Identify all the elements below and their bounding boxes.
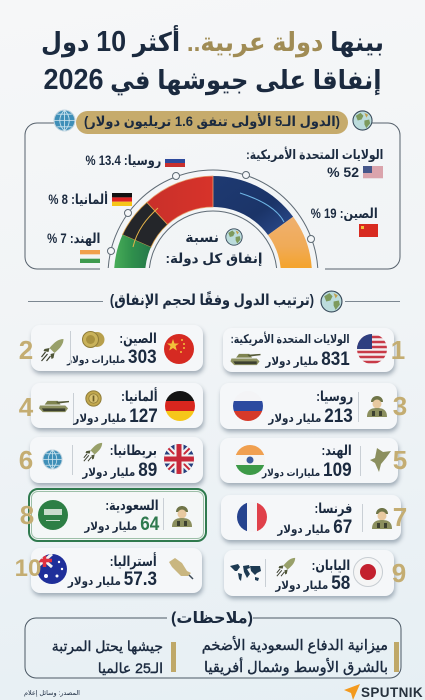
label: USA share: الولايات المتحدة الأمريكية: — [246, 147, 383, 162]
notes heading: (ملاحظات) — [171, 610, 253, 627]
card: Australia rank 10: 10 — [15, 555, 41, 582]
card: Germany rank 4 — [19, 384, 206, 434]
source: المصدر: وسائل إعلام — [24, 690, 80, 697]
label: USA share: 52 % — [327, 164, 359, 180]
card: USA rank 1: 831 مليار دولار — [266, 349, 350, 370]
card: Japan rank 9: 9 — [392, 558, 406, 588]
card: France rank 7: فرنسا: — [314, 500, 352, 516]
card: Australia rank 10 — [15, 548, 206, 598]
card: China rank 2: 2 — [19, 335, 33, 365]
card: India rank 5: 5 — [393, 445, 407, 475]
card: India rank 5: 109 مليارات دولار — [262, 460, 352, 481]
note: army rank — [52, 638, 176, 676]
icon: earth in gauge — [225, 228, 243, 246]
label: China share: الصين: 19 % — [311, 206, 378, 221]
card: Britain rank 6: 6 — [19, 445, 33, 475]
card: Britain rank 6: 89 مليار دولار — [82, 460, 157, 481]
note: army rank: جيشها يحتل المرتبة — [52, 638, 163, 654]
card: USA rank 1: 1 — [391, 335, 405, 365]
card: Saudi Arabia rank 8 highlighted — [20, 488, 207, 542]
label: India share: الهند: 7 % — [47, 231, 100, 246]
title — [41, 25, 384, 96]
card: Germany rank 4: 127 مليار دولار — [74, 406, 158, 427]
card: USA rank 1 — [222, 330, 405, 378]
card: Japan rank 9: اليابان: — [311, 557, 350, 573]
card: Japan rank 9: 58 مليار دولار — [275, 573, 350, 594]
note: army rank: الـ25 عالميا — [98, 660, 163, 676]
section heading: ranking — [28, 290, 400, 312]
note: Saudi budget: ميزانية الدفاع السعودية الأضخم — [202, 638, 388, 654]
card: China rank 2: الصين: — [120, 330, 157, 346]
label: USA share — [246, 146, 383, 180]
label: Russia share: روسيا: 13.4 % — [85, 153, 161, 168]
card: India rank 5 — [218, 439, 407, 488]
notes panel — [24, 610, 402, 678]
section heading: ranking: (ترتيب الدول وفقًا لحجم الإنفاق) — [110, 292, 314, 309]
card: USA rank 1: الولايات المتحدة الأمريكية: — [231, 332, 350, 346]
card: Russia rank 3 — [218, 384, 407, 434]
icon: earth — [352, 110, 373, 131]
card: Australia rank 10: أستراليا: — [110, 553, 157, 569]
title: إنفاقا على جيوشها في 2026 — [43, 64, 382, 96]
card: France rank 7: 67 مليار دولار — [277, 517, 352, 538]
card: Saudi Arabia rank 8 highlighted: 8 — [20, 500, 34, 530]
note: Saudi budget — [202, 636, 399, 676]
note: Saudi budget: بالشرق الأوسط وشمال أفريقيا — [204, 660, 388, 676]
card: Britain rank 6: بريطانيا: — [110, 442, 157, 458]
label: Germany share — [48, 191, 132, 207]
label: Germany share: ألمانيا: 8 % — [48, 192, 108, 207]
card: China rank 2: 303 مليارات دولار — [67, 347, 157, 368]
gauge chart — [107, 170, 318, 268]
card: Russia rank 3: روسيا: — [316, 388, 353, 404]
notes frame — [24, 618, 402, 678]
gauge centre label — [165, 228, 263, 266]
card: Russia rank 3: 3 — [393, 391, 407, 421]
label: India share — [47, 231, 100, 263]
card: Saudi Arabia rank 8 highlighted: 64 مليار دولار — [84, 514, 159, 535]
spending panel frame — [24, 122, 400, 270]
card: Saudi Arabia rank 8 highlighted: السعودية: — [106, 497, 159, 513]
gauge centre label: إنفاق كل دولة: — [165, 251, 263, 266]
label: China share — [311, 206, 378, 237]
icon: blue globe — [54, 110, 76, 132]
gauge centre label: نسبة — [185, 229, 219, 245]
card: France rank 7: 7 — [393, 502, 407, 532]
card: Britain rank 6 — [19, 438, 206, 488]
card: India rank 5: الهند: — [322, 442, 352, 458]
card: China rank 2 — [19, 326, 206, 376]
subtitle pill: (الدول الـ5 الأولى تنفق 1.6 تريليون دولار) — [84, 114, 340, 129]
card: Japan rank 9 — [222, 550, 406, 602]
icon: earth heading — [320, 290, 342, 312]
title: بينها دولة عربية.. أكثر 10 دول — [41, 26, 384, 58]
card: Australia rank 10: 57.3 مليار دولار — [68, 569, 157, 590]
card: Germany rank 4: 4 — [19, 392, 33, 422]
card: Germany rank 4: ألمانيا: — [122, 388, 158, 404]
card: France rank 7 — [220, 495, 407, 546]
card: Russia rank 3: 213 مليار دولار — [269, 406, 353, 427]
subtitle pill — [76, 111, 348, 134]
logo: Sputnik: SPUTNIK — [361, 685, 423, 700]
